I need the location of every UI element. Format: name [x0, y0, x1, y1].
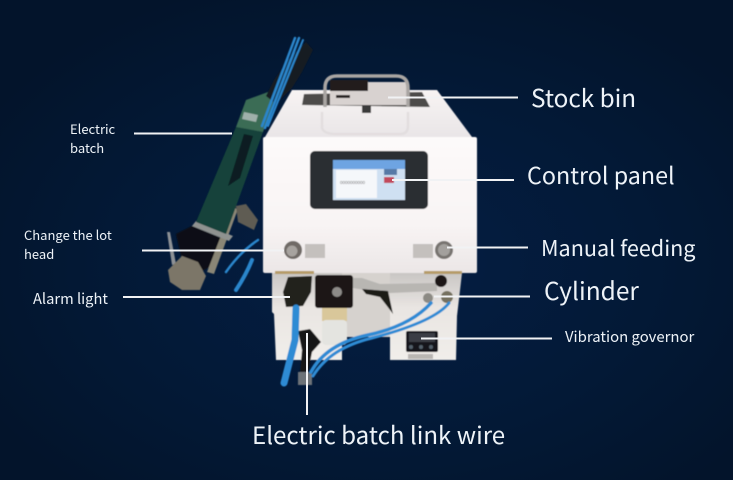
label: Alarm light: Alarm light: [33, 288, 108, 309]
lower body: left section: [272, 273, 342, 360]
label: Cylinder: Cylinder: [544, 273, 639, 308]
machine front panel: [263, 137, 477, 273]
handle: [325, 76, 408, 107]
alarm light fitting: [283, 276, 312, 307]
air fittings: [423, 275, 453, 303]
label: Vibration governor: Vibration governor: [565, 326, 695, 347]
vibration governor display: [406, 331, 438, 359]
top plate: [302, 92, 430, 107]
power connector: [298, 329, 321, 385]
lower body: middle section: [342, 273, 392, 337]
left button: [284, 241, 325, 259]
handle reflection: [322, 112, 408, 134]
touch screen: [333, 160, 405, 200]
control panel bezel: [310, 151, 428, 209]
label: Manual feeding: Manual feeding: [541, 232, 695, 263]
label: Electric batch: Electric: [70, 119, 116, 138]
leader lines: [123, 98, 552, 415]
right button: [413, 241, 453, 259]
air regulator: [315, 275, 437, 345]
label: Control panel: Control panel: [527, 157, 675, 191]
label: Electric batch link wire: Electric batch link wire: [252, 416, 505, 451]
machine top panel: [265, 90, 472, 137]
label: Stock bin: Stock bin: [531, 79, 636, 114]
label: Change the lot head: Change the lot: [24, 225, 112, 244]
blue tubes: [226, 38, 303, 290]
machine illustration: 0000000000: [340, 180, 366, 185]
label: Change the lot head: head: [24, 244, 54, 263]
machine illustration: [167, 38, 477, 385]
label: Electric batch: batch: [70, 138, 104, 157]
electric screwdriver: [167, 42, 313, 290]
blue air hoses: [284, 303, 449, 383]
lower body: right section: [390, 273, 462, 360]
